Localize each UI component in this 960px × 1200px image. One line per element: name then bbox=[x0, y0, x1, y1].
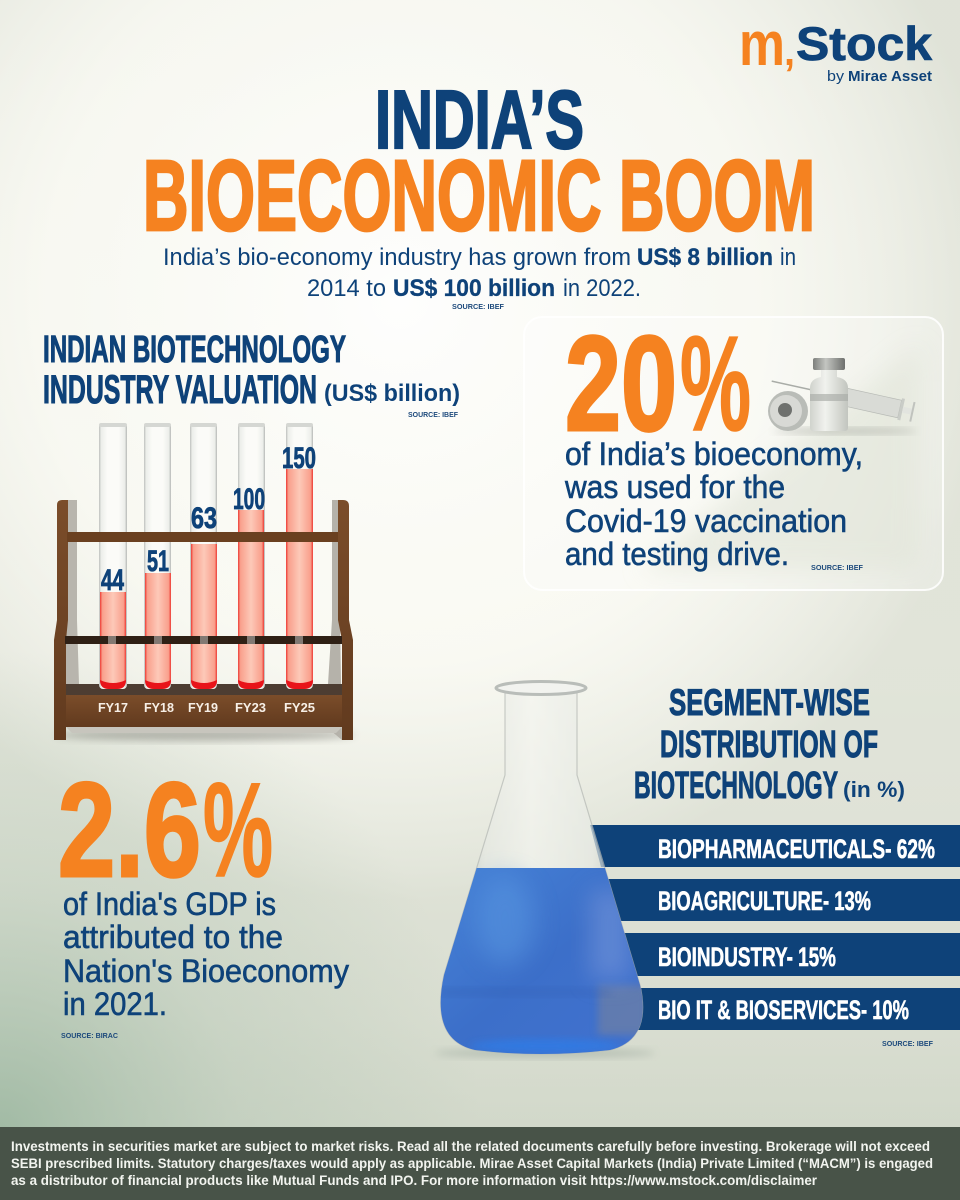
GDP text: attributed to the bbox=[63, 919, 283, 955]
tube values: 100 bbox=[233, 483, 265, 516]
panel: segment bars bbox=[590, 825, 960, 1048]
logo: mStock by Mirae Asset: Stock bbox=[796, 17, 933, 70]
tube FY19 bbox=[190, 423, 217, 689]
bar: bioindustry bbox=[624, 933, 960, 976]
bar: bioindustry: BIOINDUSTRY- 15% bbox=[658, 942, 836, 972]
GDP text: Nation's Bioeconomy bbox=[63, 953, 349, 989]
heading: Indian biotechnology industry valuation: SOURCE: IBEF bbox=[408, 410, 458, 419]
tube FY18 bbox=[144, 423, 171, 689]
subtitle text block: in 2022. bbox=[563, 275, 641, 302]
heading: segment-wise distribution bbox=[634, 682, 905, 807]
rack frame bbox=[54, 500, 353, 740]
bar: biopharmaceuticals bbox=[590, 825, 960, 867]
title bbox=[143, 73, 815, 252]
GDP text: in 2021. bbox=[63, 986, 167, 1022]
fiscal year labels: FY19 bbox=[188, 700, 218, 715]
subtitle text block: India’s bio-economy industry has grown from bbox=[163, 244, 631, 271]
tube FY23 bbox=[238, 423, 265, 689]
logo: mStock by Mirae Asset bbox=[739, 10, 933, 85]
tube values: 150 bbox=[282, 442, 316, 475]
GDP text: SOURCE: BIRAC bbox=[61, 1031, 119, 1040]
big number 2.6%: % bbox=[203, 756, 273, 905]
logo: mStock by Mirae Asset: , bbox=[784, 30, 795, 74]
GDP text bbox=[61, 886, 349, 1040]
big number 20%: % bbox=[680, 308, 751, 459]
subtitle text block: US$ 100 billion bbox=[393, 275, 555, 302]
footer disclaimer band: as a distributor of financial products like Mutual Funds and IPO. For more information visit https://www.mstock.com/disclaimer bbox=[11, 1173, 818, 1188]
vaccination text: was used for the bbox=[564, 469, 785, 505]
chart: test tube rack valuation bars bbox=[54, 423, 355, 741]
subtitle text block: in bbox=[780, 244, 796, 271]
heading: Indian biotechnology industry valuation: INDIAN BIOTECHNOLOGY bbox=[43, 329, 346, 371]
footer disclaimer band bbox=[0, 1127, 960, 1200]
fiscal year labels: FY18 bbox=[144, 700, 174, 715]
heading: Indian biotechnology industry valuation: (US$ billion) bbox=[324, 380, 460, 407]
tube values: 51 bbox=[147, 545, 169, 578]
tube FY25 bbox=[286, 423, 313, 689]
vaccination text: SOURCE: IBEF bbox=[811, 563, 863, 572]
heading: segment-wise distribution: BIOTECHNOLOGY bbox=[634, 765, 838, 807]
subtitle text block bbox=[163, 244, 796, 311]
tube values bbox=[101, 442, 316, 597]
panel: segment bars: SOURCE: IBEF bbox=[882, 1039, 933, 1048]
bar: bio IT and bioservices bbox=[636, 988, 960, 1030]
fiscal year labels: FY23 bbox=[235, 700, 266, 715]
big number 2.6%: 2.6 bbox=[58, 756, 201, 905]
tube values: 63 bbox=[191, 502, 217, 535]
heading: segment-wise distribution: SEGMENT-WISE bbox=[669, 682, 870, 723]
vaccination text: Covid-19 vaccination bbox=[565, 503, 847, 539]
subtitle text block: 2014 to bbox=[307, 275, 386, 302]
tube values: 44 bbox=[101, 564, 124, 597]
heading: segment-wise distribution: (in %) bbox=[843, 777, 905, 802]
fiscal year labels: FY25 bbox=[284, 700, 315, 715]
footer disclaimer band: Investments in securities market are subject to market risks. Read all the related documents carefully before investing. Brokerage will not exceed bbox=[11, 1139, 930, 1154]
heading: Indian biotechnology industry valuation bbox=[43, 329, 460, 419]
vaccination text: and testing drive. bbox=[565, 536, 789, 572]
footer disclaimer band: SEBI prescribed limits. Statutory charges/taxes would apply as applicable. Mirae Asset Capital Markets (India) Private Limited (“MACM”) is engaged bbox=[11, 1156, 933, 1171]
subtitle text block: SOURCE: IBEF bbox=[452, 302, 504, 311]
vaccination text bbox=[564, 436, 863, 572]
panel: 20% vaccination card bbox=[524, 308, 943, 590]
rack back and base bbox=[54, 500, 342, 740]
logo: mStock by Mirae Asset: by bbox=[827, 68, 845, 85]
icon: vaccine vial and syringe bbox=[768, 358, 917, 434]
tube FY17 bbox=[99, 423, 127, 689]
fiscal year labels: FY17 bbox=[98, 700, 128, 715]
logo: mStock by Mirae Asset: Mirae Asset bbox=[848, 68, 932, 85]
title: INDIA’S bbox=[375, 73, 584, 166]
logo: mStock by Mirae Asset: m bbox=[739, 10, 785, 79]
subtitle text block: US$ 8 billion bbox=[637, 244, 773, 271]
vaccination text: of India’s bioeconomy, bbox=[565, 436, 863, 472]
heading: Indian biotechnology industry valuation: INDUSTRY VALUATION bbox=[43, 368, 317, 412]
icon: conical flask with blue liquid bbox=[430, 682, 660, 1058]
big number 20%: 20 bbox=[565, 308, 677, 459]
rack shadow bbox=[55, 729, 355, 741]
fiscal year labels bbox=[98, 700, 315, 715]
bar: bioagriculture bbox=[606, 879, 960, 921]
GDP text: of India's GDP is bbox=[63, 886, 276, 922]
panel: 2.6% of GDP bbox=[58, 756, 349, 1040]
